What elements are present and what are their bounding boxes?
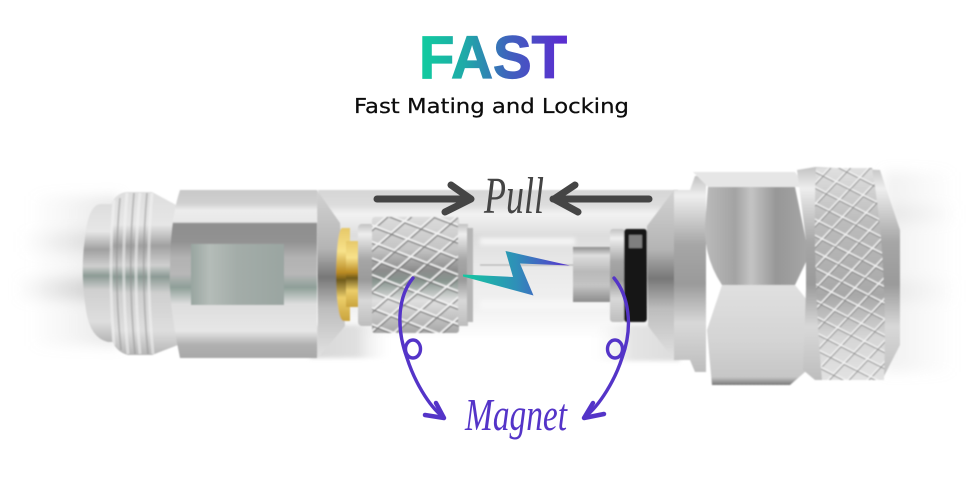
right collar bbox=[674, 176, 706, 372]
right connector bbox=[573, 167, 900, 385]
arrow: right magnet bbox=[584, 278, 628, 418]
square flat bbox=[191, 244, 284, 305]
title: FAST bbox=[419, 24, 567, 91]
right knurled nut bbox=[797, 167, 900, 380]
black magnet ring bbox=[624, 229, 647, 322]
connector front face bbox=[83, 204, 120, 342]
arrow: left magnet bbox=[400, 278, 444, 418]
centre pin bbox=[573, 247, 612, 302]
label: Magnet: Magnet bbox=[464, 389, 568, 440]
arrow: right pull bbox=[553, 185, 649, 212]
magnet arrows bbox=[400, 278, 628, 418]
label: Pull: Pull bbox=[483, 168, 544, 225]
pull arrows bbox=[377, 185, 649, 212]
motion streaks right bbox=[885, 172, 960, 372]
arrow: left pull bbox=[377, 185, 471, 212]
lightning bolt bbox=[463, 251, 570, 296]
motion streaks left bbox=[15, 196, 120, 346]
gold contact bbox=[336, 228, 359, 321]
silver ring bbox=[610, 229, 625, 322]
chamfer cone bbox=[317, 190, 345, 358]
left connector bbox=[83, 190, 359, 358]
subtitle: Fast Mating and Locking bbox=[354, 94, 629, 118]
hex nut bbox=[693, 172, 807, 385]
knurled sleeve bbox=[358, 217, 473, 333]
translucent motion tube bbox=[310, 190, 680, 361]
connector threads bbox=[111, 192, 178, 355]
right cone bbox=[647, 190, 674, 360]
connector body bbox=[170, 190, 317, 358]
